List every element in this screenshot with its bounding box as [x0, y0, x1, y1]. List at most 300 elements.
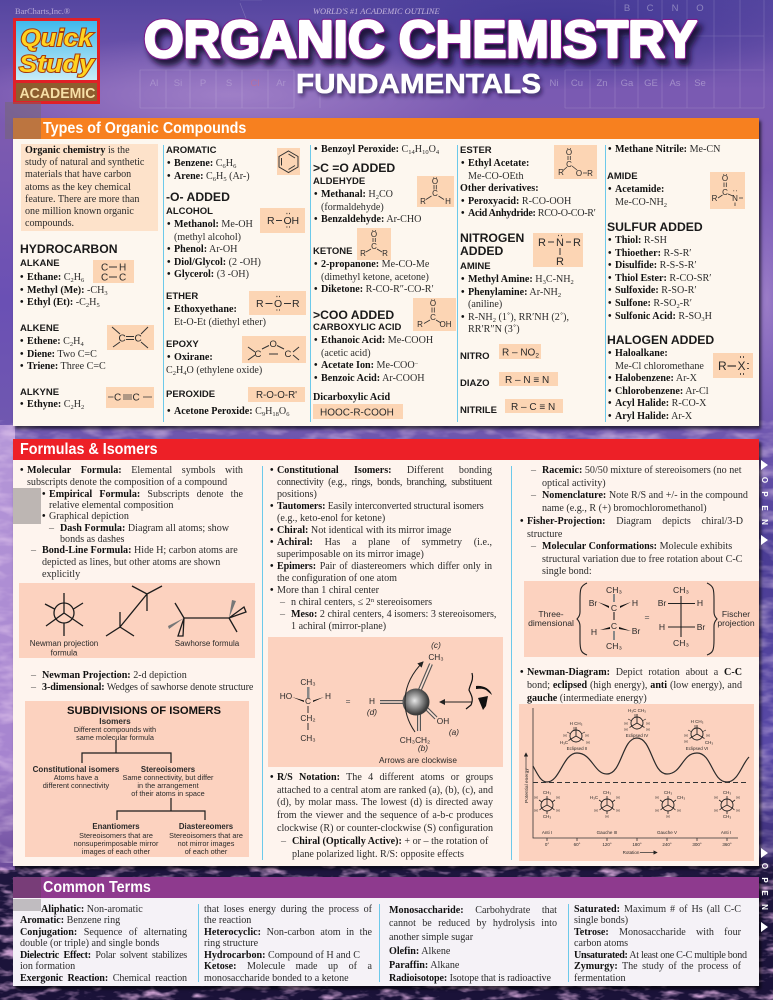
- chart: potential energy versus rotation: H: [616, 808, 620, 813]
- diagram: fischer projection: [524, 581, 759, 657]
- text: isomer types: Achiral: Has a plane of symmetry (i.e.,: [277, 537, 492, 548]
- formula: alkane: [93, 260, 134, 283]
- list: sulfur: Thiol Ester: R-CO-SR′: [615, 273, 711, 284]
- text: chiral optically active: Chiral (Optically Active): + or – the rotation of: [292, 836, 488, 847]
- chart: potential energy versus rotation: 0°: [545, 842, 549, 847]
- list: alcohol: Glycerol: (3 -OH): [174, 269, 249, 280]
- diagram: fischer projection: Br: [589, 598, 597, 608]
- chart: subdivisions of isomers tree: nonsuperimposable mirror: [74, 839, 159, 848]
- chart: potential energy versus rotation: Rotation: [623, 850, 640, 855]
- diagram: chiral centre with arrows: Arrows are clockwise: [379, 755, 457, 765]
- diagram: chiral centre with arrows: CH₃: [300, 677, 316, 687]
- section heading: types of organic compounds: Types of Organic Compounds: [43, 120, 246, 137]
- diagram: chiral centre with arrows: OH: [437, 716, 449, 726]
- list: halogen: Acyl Halide: R-CO-X: [615, 398, 706, 409]
- list: ether: [167, 304, 266, 328]
- diagram: fischer projection: =: [644, 612, 650, 622]
- diagram: newman, bond-line and sawhorse: formula: [51, 648, 78, 658]
- heading: nitrogen added: NITROGEN: [460, 231, 524, 245]
- chart: potential energy versus rotation: 180°: [632, 842, 642, 847]
- chart: subdivisions of isomers tree: Enantiomers: [92, 822, 140, 831]
- text: R/S notation: clockwise (R) or counter-clockwise (S) configuration: [277, 823, 493, 834]
- chart: potential energy versus rotation: H: [677, 808, 681, 813]
- list: sulfur: Sulfone: R-SO2-R′: [615, 298, 692, 310]
- intro callout: [21, 144, 158, 231]
- list: halogen: Aryl Halide: Ar-X: [615, 411, 692, 422]
- formula: ester: [554, 145, 597, 179]
- formula: ether: R: [292, 298, 300, 310]
- text: molecular formula: [27, 465, 243, 489]
- formula: amide: [710, 172, 745, 209]
- text: terms column 3: Monosaccharide: Carbohydrate that: [389, 904, 557, 916]
- logo: Quick Study Academic: [13, 18, 100, 104]
- text: chiral centers: n chiral centers, ≤ 2n stereoisomers: [291, 597, 432, 608]
- heading: -O- added: -O- ADDED: [166, 190, 230, 204]
- text: terms column 3: cannot be reduced by hydrolysis into: [389, 918, 557, 929]
- formula: alkyne: [106, 387, 154, 408]
- formula: nitrile: R – C ≡ N: [511, 402, 555, 413]
- periodic table backdrop: B: [624, 3, 630, 14]
- open tab: upper: [759, 458, 773, 548]
- chart: potential energy versus rotation: H: [655, 808, 659, 813]
- list: peroxide: Acetone Peroxide: C9H18O6: [174, 406, 289, 418]
- section heading: common terms: [13, 877, 759, 898]
- title: ORGANIC CHEMISTRY: [144, 11, 697, 69]
- diagram: fischer projection: Three-: [538, 609, 564, 619]
- text: terms column 4: [574, 904, 747, 984]
- chart: potential energy versus rotation: [519, 704, 754, 861]
- formula: aldehyde: O: [432, 177, 438, 186]
- section heading: formulas and isomers: Formulas & Isomers: [20, 441, 158, 458]
- text: R/S notation: attached to a central atom are ranked (a), (b), (c), and: [277, 785, 493, 796]
- diagram: chiral centre with arrows: (d): [367, 707, 377, 717]
- open tab: upper: P: [760, 491, 769, 497]
- chart: potential energy versus rotation: 240°: [662, 842, 672, 847]
- formula: alkene: C: [134, 334, 142, 344]
- heading: alkane: ALKANE: [20, 258, 60, 269]
- text: terms column 1: Aromatic: Benzene ring: [20, 915, 120, 926]
- formula: carboxylic acid: OH: [440, 320, 452, 329]
- formula: amine: R: [573, 237, 581, 249]
- diagram: fischer projection: CH₃: [606, 641, 622, 651]
- text: terms column 1: Exergonic Reaction: Chemical reaction: [20, 972, 187, 984]
- formula: dicarboxylic acid: HOOC-R-COOH: [320, 408, 394, 418]
- text: molecular formula: subscripts denote the composition of a compound: [27, 477, 227, 488]
- diagram: fischer projection: CH₃: [673, 585, 689, 595]
- list: sulfur: Thioether: R-S-R′: [615, 248, 692, 259]
- title: ORGANIC CHEMISTRY: [144, 11, 697, 69]
- chart: potential energy versus rotation: Eclipsed II: [567, 746, 587, 751]
- chart: potential energy versus rotation: CH₃: [543, 790, 551, 795]
- list: ester: Peroxyacid: R-CO-OOH: [468, 196, 571, 207]
- chart: potential energy versus rotation: Anti I: [542, 830, 552, 835]
- chart: potential energy versus rotation: H: [684, 733, 688, 738]
- heading: alkyne: ALKYNE: [20, 387, 59, 398]
- periodic table backdrop: Cl: [251, 78, 259, 89]
- formula: amine: [533, 233, 583, 267]
- text: dash formula: [60, 522, 229, 545]
- diagram: fischer projection: H: [632, 598, 638, 608]
- chart: subdivisions of isomers tree: Different compounds with: [74, 725, 156, 734]
- heading: nitrile: NITRILE: [460, 405, 497, 416]
- list: ester: Ethyl Acetate:: [468, 158, 529, 169]
- open tab: lower: P: [760, 877, 769, 883]
- chart: subdivisions of isomers tree: Atoms have a: [54, 773, 99, 782]
- periodic table backdrop: Ni: [550, 78, 558, 89]
- heading: amide: AMIDE: [607, 171, 638, 182]
- open tab: lower: O: [760, 863, 769, 869]
- formula: diazo: R – N ≡ N: [505, 375, 549, 386]
- formula: ether: [249, 291, 306, 315]
- formula: alcohol: [260, 208, 305, 233]
- chart: subdivisions of isomers tree: Constitutional isomers: [33, 765, 120, 774]
- chart: potential energy versus rotation: H CH₃: [570, 721, 583, 726]
- text: bond-line formula: explicitly: [42, 569, 80, 580]
- formula: alkyne: C: [132, 392, 140, 404]
- text: terms column 1: Conjugation: Sequence of alternating: [20, 926, 187, 938]
- text: terms column 3: Radioisotope: Isotope that is radioactive: [389, 973, 551, 984]
- heading: sulfur added: SULFUR ADDED: [607, 220, 703, 234]
- chart: potential energy versus rotation: CH₃: [705, 740, 713, 745]
- intro callout: compounds.: [25, 218, 74, 229]
- text: racemic and nomenclature: optical activity): [542, 478, 606, 489]
- chart: subdivisions of isomers tree: Stereoisomers that are: [169, 831, 243, 840]
- text: isomer types: Epimers: Pair of diastereomers which differ only in: [277, 561, 492, 572]
- open tab: upper: E: [760, 505, 769, 511]
- text: isomer types: superimposable on its mirror image): [277, 549, 424, 560]
- formula: alkane: C: [101, 262, 108, 274]
- periodic table backdrop: GE: [644, 78, 658, 89]
- text: molecular formula: Molecular Formula: Elemental symbols with: [27, 465, 243, 476]
- formula: nitrile: [505, 399, 563, 413]
- list: aromatic: Arene: C6H5 (Ar-): [174, 171, 250, 183]
- text: chiral centers: Meso: 2 chiral centers, 4 isomers: 3 stereoisomers,: [291, 609, 496, 620]
- text: isomer types: More than 1 chiral center: [277, 585, 379, 596]
- formula: amide: R: [712, 194, 718, 203]
- formula: ether: O: [274, 298, 282, 310]
- formula: ester: R: [587, 169, 593, 178]
- list: alcohol: (methyl alcohol): [174, 232, 241, 243]
- heading: ester: ESTER: [460, 145, 492, 156]
- text: chiral centers: 1 achiral (mirror-plane): [291, 621, 386, 632]
- list: sulfur: [608, 235, 712, 323]
- list: aldehyde: [314, 189, 421, 225]
- text: terms column 1: Aliphatic: Non-aromatic: [41, 904, 143, 914]
- formula: halogen: R: [718, 359, 727, 373]
- list: ketone: Diketone: R-CO-R″-CO-R′: [321, 284, 434, 295]
- list: alkene: [20, 336, 106, 372]
- chart: potential energy versus rotation: H: [586, 740, 590, 745]
- list: amide: [608, 184, 667, 209]
- text: bond-line formula: Bond-Line Formula: Hide H; carbon atoms are: [42, 545, 238, 556]
- text: terms column 4: fermentation: [574, 972, 626, 984]
- chart: subdivisions of isomers tree: not mirror images: [178, 839, 235, 848]
- diagram: chiral centre with arrows: =: [346, 696, 351, 706]
- formula: ketone: R: [360, 249, 366, 258]
- open tab: lower: E: [760, 890, 769, 896]
- formula: ether: R: [256, 298, 264, 310]
- heading: alkene: ALKENE: [20, 323, 59, 334]
- periodic table backdrop: N: [672, 3, 679, 14]
- formula: amide: C: [722, 188, 728, 197]
- diagram: chiral centre with arrows: H: [369, 696, 375, 706]
- formula: ester: R: [558, 168, 564, 177]
- chart: potential energy versus rotation: H: [666, 814, 670, 819]
- list: alkene: Ethene: C2H4: [27, 336, 84, 348]
- list: halogen: [615, 348, 709, 424]
- text: R/S notation: [277, 772, 493, 836]
- chart: potential energy versus rotation: H: [605, 814, 609, 819]
- formula: alkene: C: [118, 334, 126, 344]
- list: halogen: Me-Cl chloromethane: [615, 361, 704, 372]
- list: alkene: Triene: Three C=C: [27, 361, 106, 372]
- list: halogen: Chlorobenzene: Ar-Cl: [615, 386, 709, 397]
- text: terms column 1: [20, 904, 187, 984]
- list: amine: Methyl Amine: H3C-NH2: [468, 274, 574, 286]
- list: epoxy: C2H4O (ethylene oxide): [166, 365, 262, 377]
- diagram: chiral centre with arrows: CH₂: [300, 713, 316, 723]
- formula: aldehyde: C: [432, 189, 438, 198]
- list: halogen: Haloalkane:: [615, 348, 668, 359]
- text: terms column 3: another simple sugar: [389, 932, 473, 943]
- list: amine: (aniline): [468, 299, 502, 310]
- diagram: fischer projection: H: [659, 622, 665, 632]
- text: dash formula: Dash Formula: Diagram all atoms; show: [60, 522, 229, 534]
- formula: alkane: H: [119, 262, 126, 274]
- diagram: newman, bond-line and sawhorse: [19, 583, 255, 658]
- list: alkane: [20, 272, 108, 309]
- text: R/S notation: from the viewer and the sequence of a-b-c produces: [277, 810, 493, 821]
- text: isomer types: (e.g., keto-enol for ketone): [277, 513, 385, 524]
- chart: potential energy versus rotation: CH₃: [723, 814, 731, 819]
- title: FUNDAMENTALS: [296, 68, 541, 99]
- list: carboxylic acid: (acetic acid): [321, 348, 371, 359]
- list: carboxylic acid: Benzoic Acid: Ar-COOH: [321, 373, 425, 384]
- text: terms column 2: [204, 904, 372, 984]
- list: halogen: Halobenzene: Ar-X: [615, 373, 697, 384]
- chart: potential energy versus rotation: CH₃: [677, 795, 685, 800]
- diagram: chiral centre with arrows: C: [305, 696, 311, 706]
- formula: alkyne: C: [114, 392, 121, 404]
- heading: nitrogen added: ADDED: [460, 244, 503, 258]
- chart: potential energy versus rotation: CH₃: [723, 790, 731, 795]
- panel: common terms: [13, 877, 759, 986]
- text: newman projection and 3-dimensional: [42, 670, 253, 695]
- section heading: types of organic compounds: [13, 118, 759, 139]
- logo: Quick Study Academic: Study: [19, 51, 96, 78]
- chart: potential energy versus rotation: CH₃: [664, 790, 672, 795]
- chart: potential energy versus rotation: H₃C CH₃: [628, 708, 646, 713]
- formula: alcohol: R: [267, 215, 275, 227]
- list: carboxylic acid: Ethanoic Acid: Me-COOH: [321, 335, 433, 346]
- text: newman projection and 3-dimensional: Newman Projection: 2-d depiction: [42, 670, 187, 681]
- list: sulfur: Disulfide: R-S-S-R′: [615, 260, 697, 271]
- list: amide: Acetamide:: [615, 184, 664, 195]
- chart: subdivisions of isomers tree: Stereoisomers that are: [79, 831, 153, 840]
- diagram: fischer projection: Br: [632, 626, 640, 636]
- chart: potential energy versus rotation: Eclipsed VI: [686, 746, 708, 751]
- chart: subdivisions of isomers tree: Stereoisomers: [141, 765, 196, 774]
- formula: ketone: [357, 228, 391, 260]
- diagram: fischer projection: CH₃: [606, 585, 622, 595]
- chart: potential energy versus rotation: 60°: [574, 842, 581, 847]
- text: terms column 3: Paraffin: Alkane: [389, 960, 459, 971]
- text: empirical formula: [49, 488, 243, 523]
- list: alkane: Ethane: C2H6: [27, 272, 84, 284]
- diagram: newman, bond-line and sawhorse: Sawhorse formula: [175, 639, 240, 648]
- list: ketone: 2-propanone: Me-CO-Me: [321, 259, 429, 270]
- formula: aldehyde: [417, 176, 454, 207]
- list: alkane: Ethyl (Et): -C2H5: [27, 297, 100, 309]
- chart: potential energy versus rotation: H: [556, 808, 560, 813]
- heading: hydrocarbon: HYDROCARBON: [20, 242, 118, 256]
- heading: nitrogen added: [460, 231, 524, 258]
- diagram: chiral centre with arrows: CH₃CH₂: [400, 735, 430, 745]
- diagram: chiral centre with arrows: HO: [280, 691, 293, 701]
- chart: potential energy versus rotation: H CH₃: [691, 719, 704, 724]
- list: aldehyde: Benzaldehyde: Ar-CHO: [321, 214, 421, 225]
- text: dash formula: bonds as dashes: [60, 534, 124, 545]
- chart: potential energy versus rotation: H: [556, 795, 560, 800]
- list: amine: [461, 274, 574, 335]
- chart: potential energy versus rotation: H: [736, 795, 740, 800]
- text: racemic and nomenclature: Racemic: 50/50 mixture of stereoisomers (no net: [542, 465, 742, 476]
- list: alkene: Diene: Two C=C: [27, 349, 97, 360]
- formula: aldehyde: H: [445, 197, 451, 206]
- heading: diazo: DIAZO: [460, 378, 490, 389]
- chart: potential energy versus rotation: 300°: [692, 842, 702, 847]
- text: racemic and nomenclature: name (e.g., R (+) bromochloromethanol): [542, 503, 707, 514]
- text: terms column 1: ion formation: [20, 961, 75, 972]
- open tab: upper: O: [760, 477, 769, 483]
- chart: potential energy versus rotation: CH₃: [603, 790, 611, 795]
- text: isomer types: Constitutional Isomers: Different bonding: [277, 465, 492, 476]
- text: terms column 4: Unsaturated: At least one C-C multiple bond: [574, 950, 747, 960]
- text: chiral optically active: plane polarized light. R/S: opposite effects: [292, 849, 464, 860]
- text: isomer types: the configuration of one atom: [277, 573, 397, 584]
- list: amine: Phenylamine: Ar-NH2: [468, 287, 561, 299]
- text: empirical formula: Graphical depiction: [49, 511, 129, 522]
- text: newman diagram: bond; eclipsed (high energy), anti (low energy), and: [527, 680, 742, 691]
- formula: ketone: C: [371, 242, 377, 251]
- text: racemic and nomenclature: Nomenclature: Note R/S and +/- in the compound: [542, 490, 748, 501]
- chart: potential energy versus rotation: H: [684, 739, 688, 744]
- text: terms column 4: Zymurgy: The study of the process of: [574, 961, 741, 972]
- text: chiral centers: [291, 597, 496, 633]
- intro callout: materials that have carbon: [25, 169, 131, 180]
- diagram: fischer projection: Br: [697, 622, 705, 632]
- text: molecular conformations: structural variation due to free rotation about C-C: [542, 554, 742, 565]
- text: isomer types: positions): [277, 489, 317, 500]
- formula: aldehyde: R: [420, 197, 426, 206]
- diagram: fischer projection: C: [611, 603, 617, 613]
- periodic table backdrop: Se: [694, 78, 706, 89]
- formula: epoxy: O: [270, 339, 277, 350]
- list: ether: Et-O-Et (diethyl ether): [174, 317, 266, 328]
- list: sulfur: Thiol: R-SH: [615, 235, 667, 246]
- periodic table backdrop: O: [696, 3, 704, 14]
- formula: halogen: X: [738, 359, 746, 373]
- list: alkyne: Ethyne: C2H2: [27, 399, 84, 411]
- text: fisher projection: [527, 516, 743, 541]
- list: amine: RR′R″N (3˚): [468, 324, 520, 335]
- periodic table backdrop: Si: [174, 78, 182, 89]
- text: terms column 2: the reaction: [204, 915, 251, 926]
- periodic table backdrop: As: [669, 78, 681, 89]
- title: [144, 11, 706, 100]
- list: amide: Me-CO-NH2: [615, 197, 667, 209]
- chart: potential energy versus rotation: 360°: [722, 842, 732, 847]
- list: alcohol: Methanol: Me-OH: [174, 219, 253, 230]
- diagram: fischer projection: Br: [658, 598, 666, 608]
- formula: ketone: R: [382, 249, 388, 258]
- formula: amine: N: [556, 237, 564, 249]
- list: ether: Ethoxyethane:: [174, 304, 237, 315]
- intro callout: atoms as the key chemical: [25, 182, 131, 193]
- text: isomer types: Chiral: Not identical with its mirror image: [277, 525, 451, 536]
- diagram: fischer projection: C: [611, 621, 617, 631]
- heading: >COO added: >COO ADDED: [313, 308, 394, 322]
- publisher credit: BarCharts,Inc.®: [15, 7, 70, 16]
- periodic table backdrop: Ar: [276, 78, 286, 89]
- formula: alkene: [107, 325, 154, 350]
- heading: ketone: KETONE: [313, 246, 352, 257]
- diagram: fischer projection: projection: [717, 618, 755, 628]
- list: sulfur: Sulfonic Acid: R-SO3H: [615, 311, 712, 323]
- list: epoxy: Oxirane:: [174, 352, 213, 363]
- text: bond-line formula: [42, 545, 238, 581]
- text: newman diagram: gauche (intermediate energy): [527, 693, 647, 704]
- chart: potential energy versus rotation: H: [585, 733, 589, 738]
- formula: peroxide: R-O-O-R': [256, 390, 297, 401]
- text: newman diagram: Newman-Diagram: Depict rotation about a C-C: [527, 667, 742, 678]
- diagram: chiral centre with arrows: CH₃: [300, 733, 316, 743]
- periodic table backdrop: Ga: [621, 78, 634, 89]
- list: amine: R-NH2 (1˚), RR′NH (2˚),: [468, 312, 569, 324]
- text: empirical formula: relative elemental composition: [49, 500, 173, 511]
- diagram: newman, bond-line and sawhorse: Newman projection: [30, 639, 98, 648]
- list: alkane: Methyl (Me): -CH3: [27, 285, 108, 297]
- heading: dicarboxylic acid: Dicarboxylic Acid: [313, 392, 390, 403]
- chart: potential energy versus rotation: H: [534, 808, 538, 813]
- formula: alcohol: O: [284, 215, 292, 227]
- list: carboxylic acid: [314, 335, 433, 384]
- list: ketone: [314, 259, 434, 295]
- formula: carboxylic acid: [413, 298, 456, 331]
- intro callout: Organic chemistry is the: [25, 145, 130, 156]
- chart: potential energy versus rotation: Potential energy: [524, 768, 530, 803]
- formula: alcohol: H: [292, 215, 299, 227]
- formula: amide: N: [732, 194, 738, 203]
- heading: >C=O added: >C =O ADDED: [313, 161, 395, 175]
- section heading: common terms: Common Terms: [43, 879, 151, 896]
- panel: types of organic compounds: [13, 118, 759, 426]
- heading: aromatic: AROMATIC: [166, 145, 216, 156]
- chart: subdivisions of isomers tree: images of each other: [82, 847, 151, 856]
- diagram: chiral centre with arrows: (c): [431, 640, 441, 650]
- text: molecular conformations: single bond:: [542, 566, 592, 577]
- intro callout: study of natural and synthetic: [25, 157, 144, 168]
- text: terms column 3: [389, 904, 557, 986]
- heading: ether: ETHER: [166, 291, 198, 302]
- open tab: upper: N: [760, 519, 769, 525]
- text: fisher projection: Fisher-Projection: Diagram depicts chiral/3-D: [527, 516, 743, 527]
- panel: formulas and isomers: [13, 439, 759, 866]
- periodic table backdrop: Al: [150, 78, 158, 89]
- formula: amine: R: [538, 237, 546, 249]
- chart: potential energy versus rotation: H: [706, 733, 710, 738]
- chart: subdivisions of isomers tree: Same connectivity, but differ: [122, 773, 214, 782]
